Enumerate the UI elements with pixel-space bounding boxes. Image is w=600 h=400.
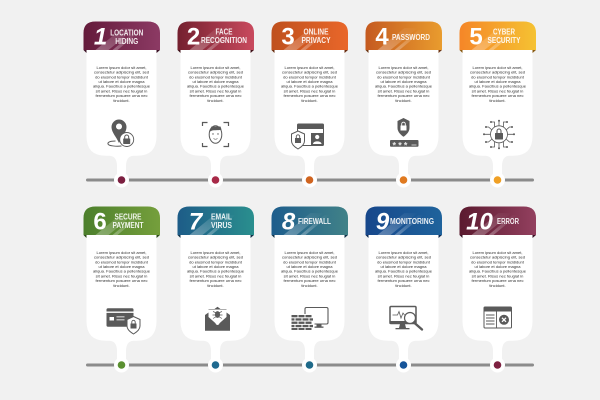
node [400, 176, 407, 184]
body text: Lorem ipsum dolor sit amet, [97, 250, 146, 255]
panel: 9 monitoring [366, 206, 442, 372]
icon: brick wall and monitor [292, 308, 328, 330]
node [212, 176, 219, 184]
node [400, 361, 407, 369]
body text: Lorem ipsum dolor sit amet, [473, 65, 522, 70]
body text: Lorem ipsum dolor sit amet, [473, 250, 522, 255]
card body [274, 235, 344, 372]
title: MONITORING [390, 217, 434, 226]
icon: shield and password field: *** [392, 140, 410, 150]
body text: aliqua. Faucibus a pellentesque [375, 84, 433, 89]
panel: 8 firewall [272, 206, 348, 372]
number: 7 [189, 208, 204, 236]
body text: tincidunt. [113, 98, 130, 103]
body text: Lorem ipsum dolor sit amet, [191, 65, 240, 70]
body text: aliqua. Faucibus a pellentesque [281, 84, 339, 89]
number: 9 [376, 208, 390, 236]
title: ONLINE [304, 28, 329, 37]
icon: monitor with magnifier [390, 306, 422, 330]
icon: browser with shield and user [292, 124, 324, 149]
card body [274, 50, 344, 188]
body text: do eiusmod tempor incididunt [377, 74, 431, 79]
body text: do eiusmod tempor incididunt [189, 259, 243, 264]
body text: ut labore et dolore magna [98, 79, 145, 84]
body text: consectetur adipiscing elit, sed [188, 70, 243, 75]
body text: ut labore et dolore magna [98, 264, 145, 269]
node [494, 361, 501, 369]
body text: ut labore et dolore magna [380, 264, 427, 269]
number: 4 [375, 24, 389, 50]
body text: consectetur adipiscing elit, sed [470, 70, 525, 75]
body text: Lorem ipsum dolor sit amet, [285, 250, 334, 255]
body text: ut labore et dolore magna [474, 79, 521, 84]
body text: sit amet. Risus nec feugiat in [190, 273, 241, 278]
title: PRIVACY [302, 36, 331, 45]
panel: 5 cyber security [460, 22, 536, 188]
title: PAYMENT [112, 221, 144, 230]
title: EMAIL [211, 213, 232, 222]
body text: sit amet. Risus nec feugiat in [284, 273, 335, 278]
icon: face scan [202, 122, 228, 146]
icon: circuit lock [483, 120, 515, 149]
body text: do eiusmod tempor incididunt [283, 74, 337, 79]
body text: fermentum posuere urna nec [190, 278, 241, 283]
title: SECURE [114, 213, 142, 222]
title: VIRUS [211, 221, 233, 230]
body text: ut labore et dolore magna [286, 79, 333, 84]
body text: tincidunt. [489, 283, 506, 288]
icon: browser error window [484, 307, 512, 328]
body text: Lorem ipsum dolor sit amet, [191, 250, 240, 255]
header ribbon [460, 22, 536, 53]
body text: tincidunt. [395, 98, 412, 103]
body text: tincidunt. [395, 283, 412, 288]
title: HIDING [115, 37, 138, 46]
body text: ut labore et dolore magna [474, 264, 521, 269]
body text: tincidunt. [301, 98, 318, 103]
body text: tincidunt. [207, 283, 224, 288]
body text: fermentum posuere urna nec [284, 278, 335, 283]
body text: aliqua. Faucibus a pellentesque [281, 269, 339, 274]
header ribbon [84, 22, 160, 53]
body text: fermentum posuere urna nec [378, 278, 429, 283]
body text: Lorem ipsum dolor sit amet, [285, 65, 334, 70]
body text: ut labore et dolore magna [192, 79, 239, 84]
body text: tincidunt. [301, 283, 318, 288]
body text: Lorem ipsum dolor sit amet, [97, 65, 146, 70]
header ribbon [178, 206, 254, 238]
body text: do eiusmod tempor incididunt [95, 259, 149, 264]
number: 10 [466, 208, 493, 236]
body text: sit amet. Risus nec feugiat in [284, 88, 335, 93]
header ribbon [272, 206, 348, 238]
body text: ut labore et dolore magna [380, 79, 427, 84]
card body [462, 235, 532, 372]
body text: fermentum posuere urna nec [472, 93, 523, 98]
title: FACE [216, 28, 233, 37]
header ribbon [366, 22, 442, 53]
body text: aliqua. Faucibus a pellentesque [469, 269, 527, 274]
body text: aliqua. Faucibus a pellentesque [187, 269, 245, 274]
title: SECURITY [488, 36, 521, 45]
title: RECOGNITION [201, 36, 247, 45]
number: 3 [281, 24, 295, 50]
node [306, 176, 313, 184]
number: 6 [93, 208, 107, 236]
body text: sit amet. Risus nec feugiat in [472, 88, 523, 93]
body text: consectetur adipiscing elit, sed [282, 255, 337, 260]
panel: 7 email virus [178, 206, 254, 372]
card body [462, 50, 532, 188]
header ribbon [84, 206, 160, 238]
body text: fermentum posuere urna nec [190, 93, 241, 98]
node [118, 176, 125, 184]
panel: 6 secure payment [84, 206, 160, 372]
body text: sit amet. Risus nec feugiat in [190, 88, 241, 93]
card body [86, 50, 156, 188]
body text: consectetur adipiscing elit, sed [470, 255, 525, 260]
timeline: row 1 [86, 178, 534, 182]
body text: consectetur adipiscing elit, sed [94, 255, 149, 260]
number: 1 [94, 24, 107, 50]
icon: credit card with shield [106, 308, 140, 334]
title: CYBER [493, 28, 515, 37]
icon: envelope with bug [205, 307, 230, 331]
body text: ut labore et dolore magna [192, 264, 239, 269]
node [494, 176, 501, 184]
body text: ut labore et dolore magna [286, 264, 333, 269]
body text: do eiusmod tempor incididunt [283, 259, 337, 264]
body text: consectetur adipiscing elit, sed [188, 255, 243, 260]
body text: do eiusmod tempor incididunt [471, 74, 525, 79]
body text: do eiusmod tempor incididunt [471, 259, 525, 264]
body text: fermentum posuere urna nec [96, 278, 147, 283]
title: ERROR [497, 217, 519, 226]
body text: Lorem ipsum dolor sit amet, [379, 65, 428, 70]
body text: tincidunt. [207, 98, 224, 103]
number: 5 [469, 24, 483, 50]
body text: sit amet. Risus nec feugiat in [96, 88, 147, 93]
body text: consectetur adipiscing elit, sed [376, 70, 431, 75]
panel: 10 error [460, 206, 536, 372]
body text: fermentum posuere urna nec [284, 93, 335, 98]
header ribbon [366, 206, 442, 238]
body text: consectetur adipiscing elit, sed [376, 255, 431, 260]
card body [180, 50, 250, 188]
card body [180, 235, 250, 372]
body text: aliqua. Faucibus a pellentesque [93, 269, 151, 274]
body text: fermentum posuere urna nec [378, 93, 429, 98]
panel: 4 password [366, 22, 442, 188]
number: 2 [187, 24, 200, 50]
body text: aliqua. Faucibus a pellentesque [469, 84, 527, 89]
title: LOCATION [110, 29, 143, 38]
node [118, 361, 125, 369]
body text: aliqua. Faucibus a pellentesque [93, 84, 151, 89]
body text: tincidunt. [113, 283, 130, 288]
number: 8 [282, 208, 296, 236]
card body [368, 50, 438, 188]
body text: aliqua. Faucibus a pellentesque [375, 269, 433, 274]
panel: 1 location hiding [84, 22, 160, 188]
node [212, 361, 219, 369]
card body [86, 235, 156, 372]
body text: consectetur adipiscing elit, sed [282, 70, 337, 75]
panel: 3 online privacy [272, 22, 348, 188]
icon: location pin with lock [108, 120, 134, 146]
body text: do eiusmod tempor incididunt [95, 74, 149, 79]
header ribbon [178, 22, 254, 53]
body text: consectetur adipiscing elit, sed [94, 70, 149, 75]
header ribbon [272, 22, 348, 53]
timeline: row 2 [86, 364, 534, 366]
body text: fermentum posuere urna nec [96, 93, 147, 98]
node [306, 361, 313, 369]
body text: aliqua. Faucibus a pellentesque [187, 84, 245, 89]
body text: sit amet. Risus nec feugiat in [472, 273, 523, 278]
icon: shield and password field [390, 118, 418, 150]
title: PASSWORD [392, 33, 430, 42]
body text: fermentum posuere urna nec [472, 278, 523, 283]
body text: Lorem ipsum dolor sit amet, [379, 250, 428, 255]
body text: sit amet. Risus nec feugiat in [378, 88, 429, 93]
body text: sit amet. Risus nec feugiat in [96, 273, 147, 278]
body text: sit amet. Risus nec feugiat in [378, 273, 429, 278]
title: FIREWALL [298, 217, 331, 226]
body text: tincidunt. [489, 98, 506, 103]
header ribbon [460, 206, 536, 238]
card body [368, 235, 438, 372]
body text: do eiusmod tempor incididunt [189, 74, 243, 79]
panel: 2 face recognition [178, 22, 254, 188]
body text: do eiusmod tempor incididunt [377, 259, 431, 264]
